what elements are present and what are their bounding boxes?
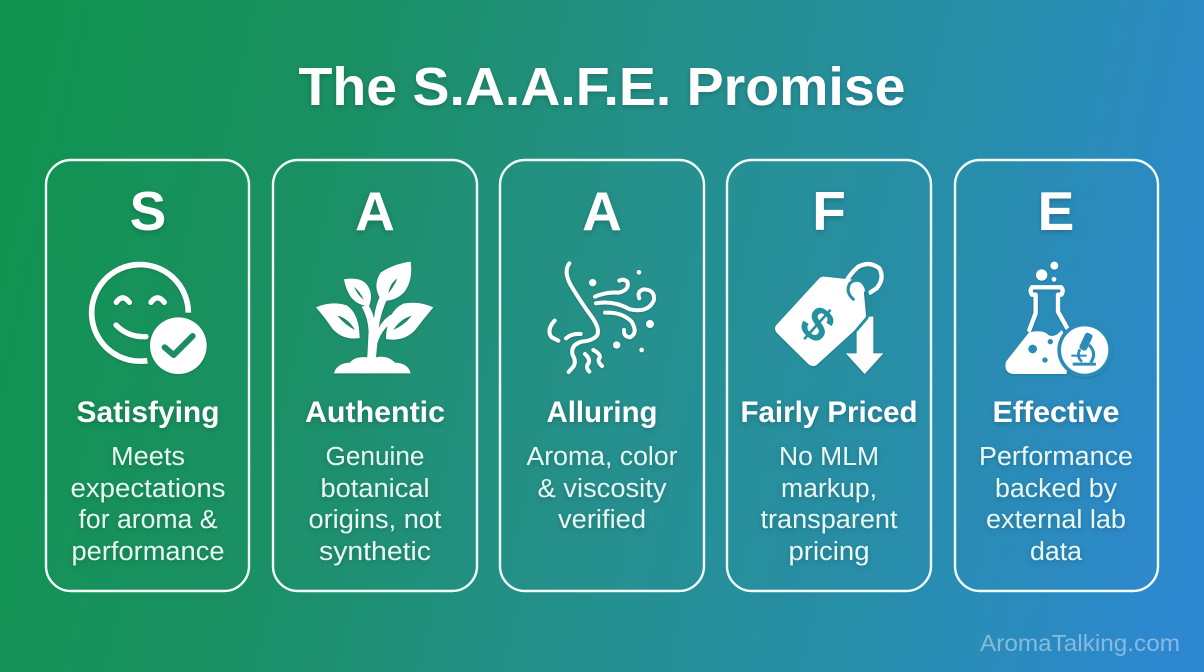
description: expectations	[70, 475, 226, 503]
icon: sprout	[316, 262, 433, 373]
description: backed by	[995, 475, 1117, 503]
icon: price tag with down arrow	[775, 264, 883, 374]
name: Alluring	[546, 396, 658, 429]
description	[70, 443, 226, 566]
description: origins, not	[308, 506, 442, 534]
panel: E Effective	[955, 160, 1158, 591]
letter E: E	[1038, 180, 1074, 242]
description: No MLM	[779, 443, 879, 471]
description: Meets	[111, 443, 185, 471]
description: botanical	[320, 475, 430, 503]
name: Satisfying	[76, 396, 220, 429]
description: pricing	[788, 538, 870, 566]
description: Performance	[979, 443, 1133, 471]
name: Authentic	[305, 396, 445, 429]
description: for aroma &	[78, 506, 218, 534]
letter A: A	[355, 180, 395, 242]
panel: A Alluring	[500, 160, 704, 591]
icon: smiley with check	[92, 265, 207, 374]
panel: S Satisfying	[46, 160, 249, 591]
description: markup,	[781, 475, 877, 503]
description: data	[1030, 538, 1083, 566]
title: The S.A.A.F.E. Promise	[298, 57, 906, 117]
description: transparent	[760, 506, 898, 534]
description	[526, 443, 678, 534]
description	[308, 443, 442, 566]
description: Aroma, color	[526, 443, 678, 471]
name: Fairly Priced	[740, 396, 918, 429]
letter S: S	[130, 180, 166, 242]
panel: A Authentic	[273, 160, 477, 591]
description: external lab	[986, 506, 1126, 534]
description: performance	[72, 538, 224, 566]
icon: flask with microscope badge	[1005, 262, 1112, 377]
letter A: A	[582, 180, 622, 242]
panel: F Fairly Priced	[727, 160, 931, 591]
letter F: F	[812, 180, 846, 242]
description: synthetic	[319, 538, 431, 566]
icon: price tag with down arrow: $	[789, 295, 845, 354]
description: verified	[558, 506, 646, 534]
name: Effective	[992, 396, 1120, 429]
description: & viscosity	[538, 475, 667, 503]
watermark: AromaTalking.com	[980, 630, 1180, 656]
description: Genuine	[326, 443, 424, 471]
description	[760, 443, 898, 566]
description	[979, 443, 1133, 566]
icon: nose and aroma	[549, 263, 654, 372]
